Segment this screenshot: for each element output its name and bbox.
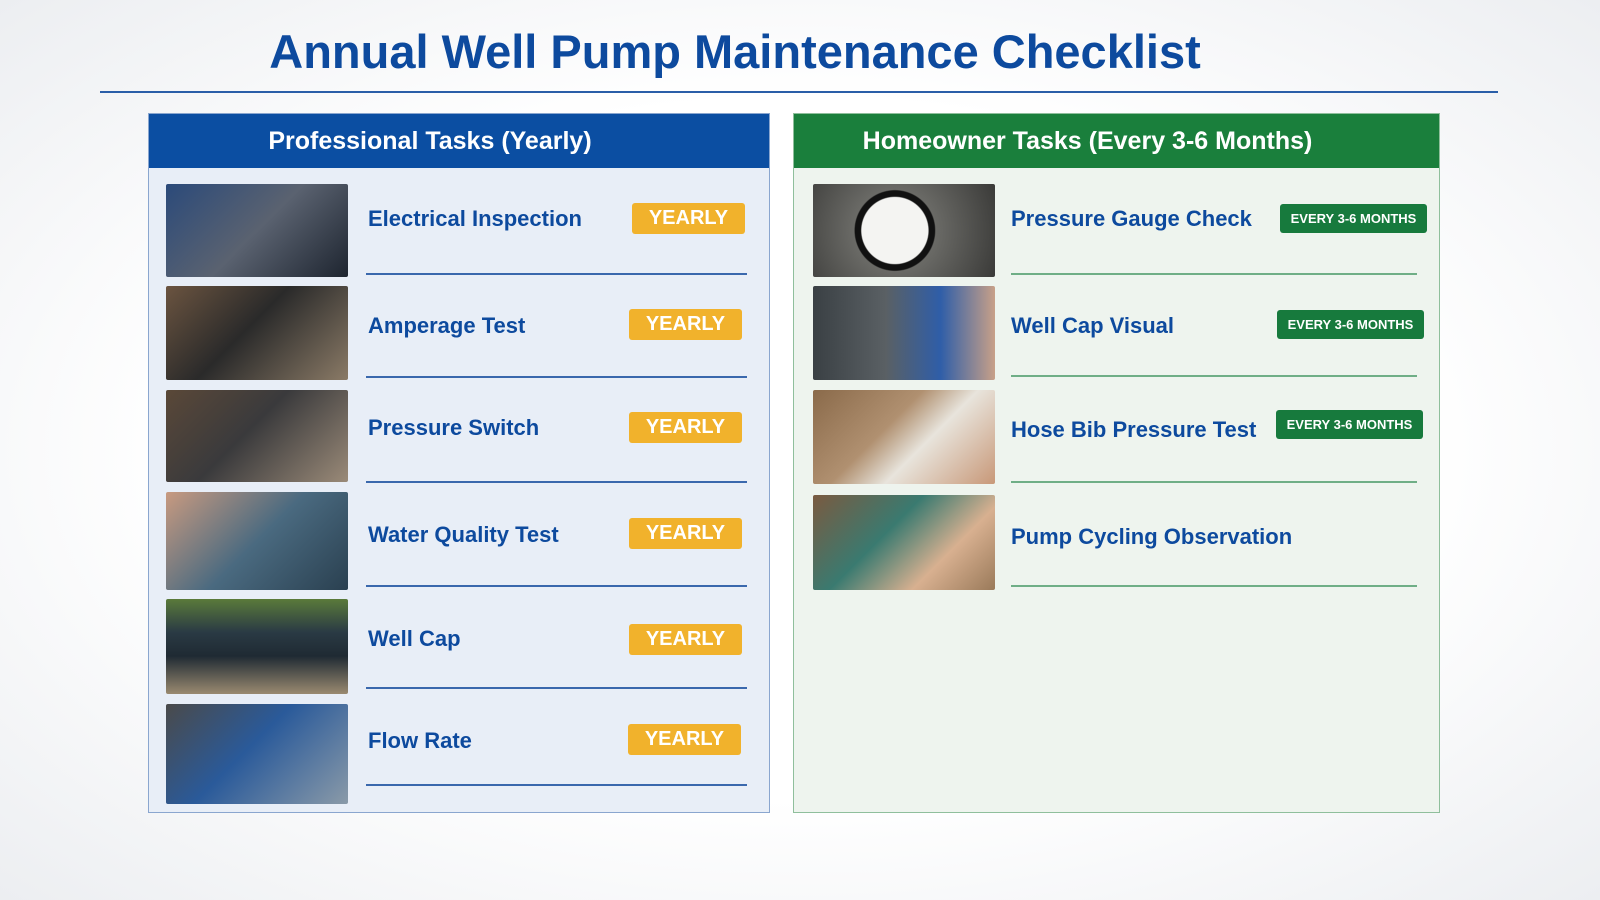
badge: EVERY 3-6 MONTHS [1288, 317, 1413, 332]
row: Hose Bib Pressure Test: Hose Bib Pressure Test [1011, 417, 1256, 442]
badge [1280, 204, 1427, 233]
photo: flow [166, 704, 348, 804]
header: professional: Professional Tasks (Yearly) [268, 126, 592, 154]
badge [629, 624, 742, 655]
row: Well Cap Visual [813, 286, 1424, 380]
badge [632, 203, 745, 234]
photo: hose bib [813, 390, 995, 484]
row: Amperage Test: Amperage Test [368, 313, 525, 338]
header: professional [149, 114, 769, 168]
badge: YEARLY [646, 628, 725, 650]
badge [629, 518, 742, 549]
photo: amperage [166, 286, 348, 380]
row: Amperage Test [166, 286, 747, 380]
badge: YEARLY [649, 207, 728, 229]
row: Flow Rate [166, 704, 747, 804]
header: homeowner: Homeowner Tasks (Every 3-6 Months) [863, 126, 1312, 154]
row: Electrical Inspection: Electrical Inspection [368, 206, 582, 231]
row: Pressure Gauge Check [813, 184, 1427, 277]
row: Electrical Inspection [166, 184, 747, 277]
row: Pressure Gauge Check: Pressure Gauge Check [1011, 206, 1252, 231]
badge: EVERY 3-6 MONTHS [1291, 211, 1416, 226]
photo: electrical [166, 184, 348, 277]
photo: well cap [166, 599, 348, 694]
row: Hose Bib Pressure Test [813, 390, 1423, 484]
badge: YEARLY [646, 313, 725, 335]
panel: homeowner tasks [793, 113, 1440, 813]
row: Flow Rate: Flow Rate [368, 728, 472, 753]
row: Pressure Switch: Pressure Switch [368, 415, 539, 440]
photo: pump cycling [813, 495, 995, 590]
badge: YEARLY [646, 522, 725, 544]
badge: EVERY 3-6 MONTHS [1287, 417, 1412, 432]
header: homeowner [794, 114, 1439, 168]
title: Annual Well Pump Maintenance Checklist [269, 25, 1201, 78]
badge: YEARLY [646, 416, 725, 438]
row: Well Cap: Well Cap [368, 626, 461, 651]
badge [628, 724, 741, 755]
badge [1277, 310, 1424, 339]
row: Well Cap [166, 599, 747, 694]
photo: gauge [813, 184, 995, 277]
badge: YEARLY [645, 728, 724, 750]
row: Pump Cycling Observation: Pump Cycling Observation [1011, 524, 1292, 549]
row: Pump Cycling Observation [813, 495, 1417, 590]
photo: well cap visual [813, 286, 995, 380]
photo: pressure switch [166, 390, 348, 482]
row: Pressure Switch [166, 390, 747, 483]
row: Well Cap Visual: Well Cap Visual [1011, 313, 1174, 338]
panel: professional tasks [148, 113, 770, 813]
photo: water [166, 492, 348, 590]
row: Water Quality Test: Water Quality Test [368, 522, 559, 547]
row: Water Quality Test [166, 492, 747, 590]
badge [1276, 410, 1423, 439]
badge [629, 309, 742, 340]
badge [629, 412, 742, 443]
